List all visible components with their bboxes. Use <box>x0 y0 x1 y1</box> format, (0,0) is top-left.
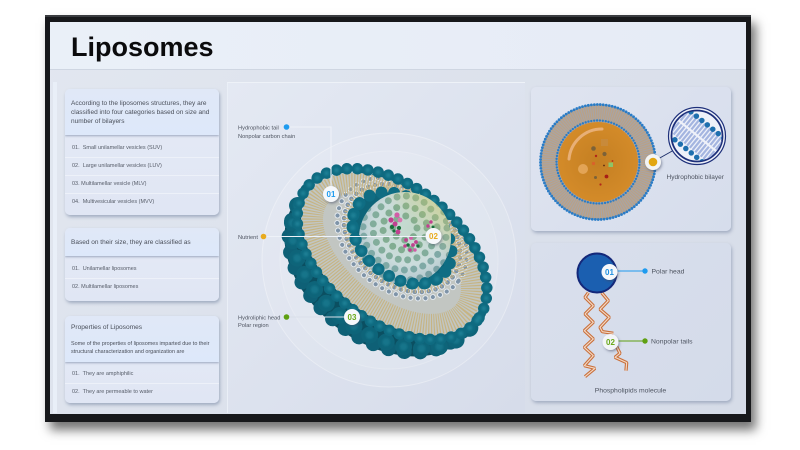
lipid tails <box>678 112 722 150</box>
center panel <box>227 82 525 413</box>
central bubbles <box>334 176 470 302</box>
panel: size classification <box>65 228 219 301</box>
callout 03: hydrophilic head: 03 <box>348 313 357 322</box>
screen background <box>50 22 746 414</box>
halo circles <box>262 133 516 387</box>
diagrams layer <box>238 103 726 394</box>
panel: phospholipid molecule card <box>531 243 731 401</box>
magnified bilayer detail <box>668 106 726 166</box>
properties heading and text: Properties of Liposomes <box>71 324 142 331</box>
hydrophobic bilayer label: Hydrophobic bilayer <box>666 174 725 181</box>
phospholipid molecule illustration <box>578 254 627 377</box>
outer head groups <box>540 104 656 220</box>
callout 02: nutrient: Nutrient <box>238 235 258 241</box>
callout: polar head: Polar head <box>652 268 685 276</box>
intro text <box>65 89 219 135</box>
panel: properties of liposomes <box>65 316 219 403</box>
polar head <box>578 254 616 292</box>
item 03: 03. Multilamellar vesicle (MLV) <box>72 181 146 187</box>
lipid tails <box>584 293 627 377</box>
inner bead ring back <box>335 173 469 303</box>
item 02: 02. Large unilamellar vesicles (LUV) <box>72 163 162 169</box>
property 02: 02. They are permeable to water <box>72 389 153 395</box>
magnifier connector and badge <box>645 150 674 170</box>
callout 01: hydrophobic tail: 01 <box>327 190 336 199</box>
inner aqueous sphere <box>359 192 451 284</box>
callout 01: hydrophobic tail <box>238 124 339 202</box>
callout 02: nutrient: 02 <box>429 232 438 241</box>
nutrient cluster 2 <box>403 236 420 252</box>
size heading <box>65 228 219 256</box>
hydrophobic tails inner <box>343 182 461 294</box>
title: Liposomes <box>71 32 214 62</box>
properties heading and text: structural characterization and organization are <box>71 349 184 355</box>
intro text: According to the liposomes structures, they are classified into four categories based on size and number of bilayers <box>71 100 209 125</box>
nutrient cluster 1 <box>388 212 402 234</box>
hydrophobic tails outer <box>287 156 497 352</box>
core particles <box>591 139 613 186</box>
callout 03: hydrophilic head: Polar region <box>238 323 269 329</box>
item 01: 01. Small unilamellar vesicles (SUV) <box>72 145 162 151</box>
left strip <box>53 82 57 413</box>
molecule caption: Phospholipids molecule <box>595 388 666 394</box>
lower bead stack <box>250 143 513 393</box>
callout: nonpolar tails <box>602 334 693 350</box>
orange core <box>558 122 638 202</box>
item 04: 04. Multivesicular vesicles (MVV) <box>72 199 154 205</box>
callout: nonpolar tails: 02 <box>606 338 615 347</box>
core highlights <box>569 129 602 159</box>
callout: polar head <box>602 264 685 280</box>
callout 03: hydrophilic head: Hydroliphic head <box>238 316 280 322</box>
callout 02: nutrient <box>238 228 442 244</box>
inner head groups <box>556 120 640 204</box>
nutrient cluster 3 <box>426 220 434 228</box>
inner bead ring front <box>335 204 445 303</box>
callout 01: hydrophobic tail: Nonpolar carbon chain <box>238 134 295 140</box>
outer bead ring <box>265 134 519 374</box>
size heading: Based on their size, they are classified as <box>71 239 191 246</box>
size item 02: 02. Multilamellar liposomes <box>72 284 138 290</box>
callout 03: hydrophilic head <box>238 309 360 329</box>
callout: polar head: 01 <box>605 268 614 277</box>
head rows <box>688 111 722 140</box>
properties heading and text <box>65 316 219 362</box>
monitor bezel <box>45 15 751 422</box>
panel: liposome structure categories <box>65 89 219 215</box>
property 01: 01. They are amphiphilic <box>72 371 133 377</box>
size item 01: 01. Unilamellar liposomes <box>72 266 136 272</box>
liposome cross-section illustration <box>282 163 493 360</box>
title band <box>50 22 746 70</box>
top membrane disc <box>271 140 513 368</box>
properties heading and text: Some of the properties of liposomes imparted due to their <box>71 341 209 347</box>
panel: phospholipid bilayer card <box>531 87 731 231</box>
liposome sphere illustration <box>540 104 656 220</box>
callout: nonpolar tails: Nonpolar tails <box>651 338 693 346</box>
lipid tails ring <box>548 112 648 212</box>
callout 01: hydrophobic tail: Hydrophobic tail <box>238 126 279 132</box>
